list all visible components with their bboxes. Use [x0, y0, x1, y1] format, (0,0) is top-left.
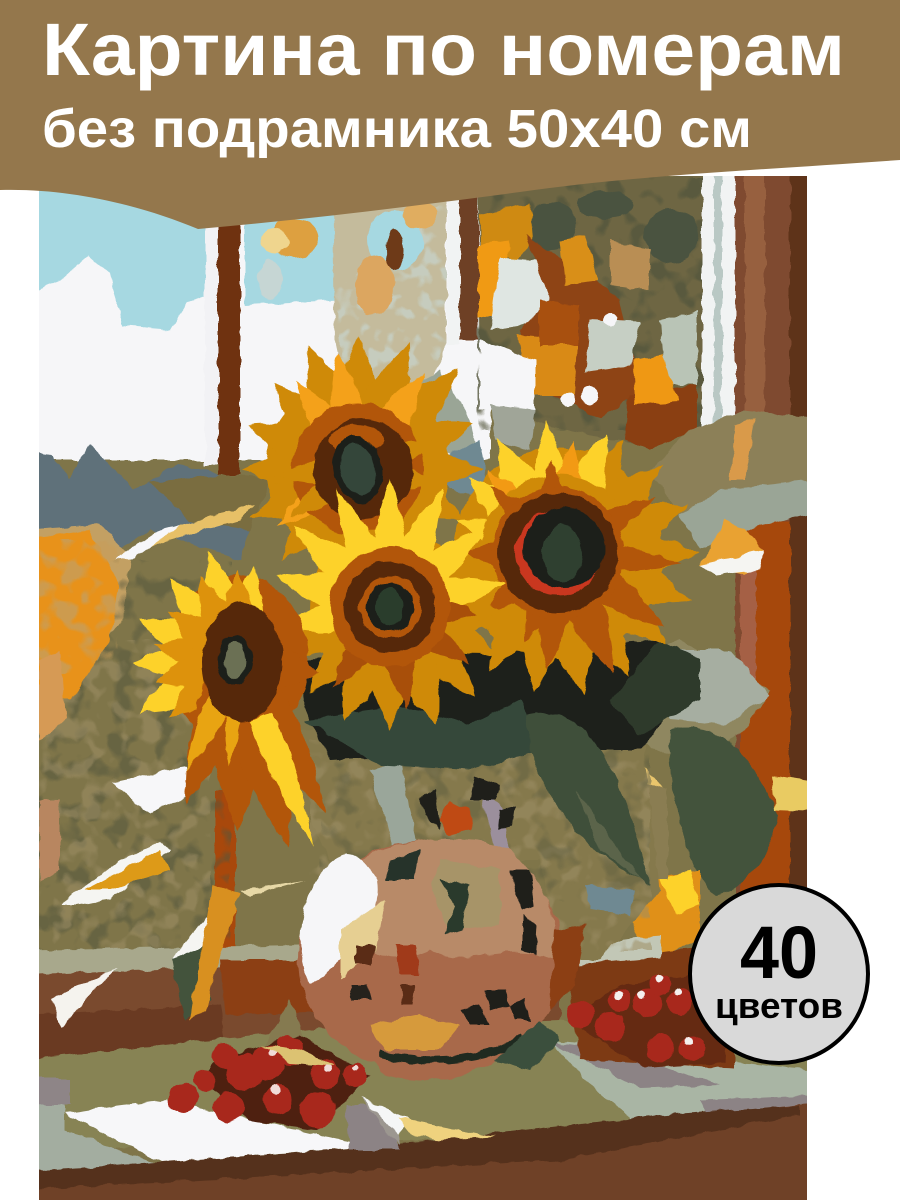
sunflower: centre — [271, 477, 508, 735]
right background leaves — [632, 410, 807, 952]
title: Картина по номерам — [42, 8, 845, 91]
cherries right — [566, 974, 730, 1068]
sunflower: left — [133, 550, 326, 848]
painting background — [20, 160, 830, 1200]
vase neck — [300, 720, 660, 960]
sunflower: right — [445, 419, 701, 700]
cherries left — [168, 1035, 370, 1130]
subtitle: без подрамника 50х40 см — [42, 99, 752, 159]
badge label: цветов — [715, 985, 843, 1026]
vase — [298, 839, 585, 1080]
sunflower: top — [240, 333, 482, 575]
header banner — [0, 0, 900, 229]
painting: sunflowers in a vase — [20, 160, 830, 1200]
badge number: 40 — [740, 911, 818, 994]
middle foliage — [258, 185, 490, 500]
left leaves — [60, 503, 305, 1045]
window sill and table — [20, 935, 830, 1200]
badge: 40 colours — [690, 885, 868, 1063]
large dark leaves — [290, 640, 700, 885]
autumn foliage — [478, 176, 702, 450]
left background mottling — [39, 530, 232, 950]
